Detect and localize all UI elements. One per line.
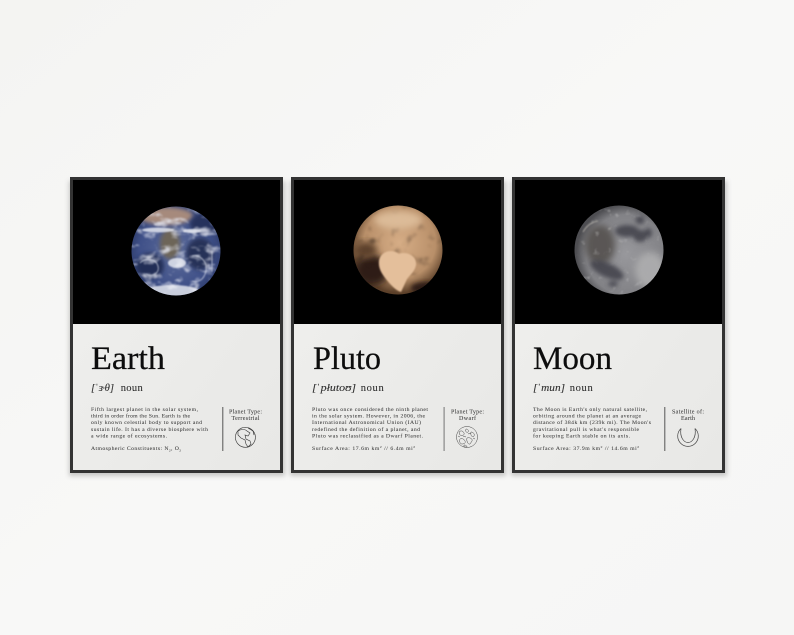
fact: Pluto surface area: 2 <box>380 445 382 449</box>
text block: Earth description: third in order from the Sun. Earth is the <box>91 413 190 420</box>
fact: Moon surface area: // 14.6m mi <box>603 446 637 452</box>
label: planet type <box>229 410 262 422</box>
phonetic: Pluto <box>312 383 384 394</box>
panel: Moon poster <box>512 177 725 473</box>
phonetic: Earth <box>91 383 143 394</box>
icon: Pluto line drawing <box>456 426 478 448</box>
text block: Earth description: a wide range of ecosystems. <box>91 432 168 439</box>
label: satellite of: Earth <box>681 416 695 422</box>
label: planet type: Dwarf <box>459 415 476 422</box>
fact: atmospheric constituents: 2 <box>179 448 181 452</box>
label: satellite of: Satellite of: <box>672 408 704 416</box>
phonetic: Moon: [ˈmun] <box>533 383 565 394</box>
text block: Pluto description: in the solar system. However, in 2006, the <box>312 414 425 420</box>
text block: Earth description: sustain life. It has a diverse biosphere with <box>91 426 208 433</box>
text block: Moon description <box>533 407 652 439</box>
icon: globe <box>235 427 255 447</box>
text block: Pluto description: Pluto was reclassified as a Dwarf Planet. <box>312 432 424 439</box>
divider <box>222 407 223 451</box>
phonetic: Pluto: [ˈpłutoʊ] <box>312 383 356 394</box>
phonetic: Moon <box>533 383 593 394</box>
fact: Pluto surface area: 2 <box>413 445 415 449</box>
divider <box>444 407 445 451</box>
label: satellite of <box>672 408 704 422</box>
title: Moon: Moon <box>533 341 612 377</box>
fact: atmospheric constituents: 2 <box>169 448 171 452</box>
phonetic: Earth: noun <box>121 383 143 394</box>
label: planet type: Terrestrial <box>232 416 260 422</box>
title: Earth: Earth <box>91 341 166 377</box>
title: Pluto: Pluto <box>313 341 381 377</box>
fact: Moon surface area: Surface Area: 37.9m km <box>533 446 600 452</box>
icon: Moon photograph <box>574 205 665 295</box>
label: planet type: Planet Type: <box>451 410 484 416</box>
fact: Pluto surface area: Surface Area: 17.6m km <box>312 446 379 452</box>
text block: Earth description: Fifth largest planet in the solar system, <box>91 406 199 413</box>
fact: atmospheric constituents: , O <box>171 446 179 452</box>
frame shadows <box>69 181 727 476</box>
text block: Earth description <box>91 406 208 439</box>
panel: Pluto poster <box>291 177 504 473</box>
divider <box>664 407 665 451</box>
text block: Moon description: gravitational pull is what's responsible <box>533 427 639 433</box>
label: planet type: Planet Type: <box>229 410 262 416</box>
text block: Earth description: only known celestial body to support and <box>91 420 202 426</box>
text block: Moon description: distance of 384k km (239k mi). The Moon's <box>533 419 652 426</box>
fact: Pluto surface area: // 6.4m mi <box>382 446 413 452</box>
icon: crescent <box>678 428 698 446</box>
fact: Moon surface area: 2 <box>637 445 639 449</box>
phonetic: Pluto: noun <box>361 383 384 394</box>
text block: Pluto description: redefined the definition of a planet, and <box>312 426 420 433</box>
phonetic: Earth: [ˈɝθ] <box>91 383 114 394</box>
text block: Pluto description <box>312 407 428 439</box>
fact: atmospheric constituents: Atmospheric Constituents: N <box>91 446 168 452</box>
text block: Pluto description: International Astronomical Union (IAU) <box>312 419 421 426</box>
text block: Moon description: for keeping Earth stable on its axis. <box>533 432 631 439</box>
fact: Moon surface area: 2 <box>601 445 603 449</box>
icon: Pluto photograph <box>353 205 443 295</box>
panel: Earth poster <box>70 177 283 473</box>
phonetic: Moon: noun <box>570 383 593 394</box>
text block: Moon description: The Moon is Earth's only natural satellite, <box>533 407 648 413</box>
text block: Pluto description: Pluto was once considered the ninth planet <box>312 407 428 413</box>
label: planet type <box>451 410 484 422</box>
icon: Earth photograph <box>130 205 222 297</box>
text block: Moon description: orbiting around the planet at an average <box>533 414 641 420</box>
